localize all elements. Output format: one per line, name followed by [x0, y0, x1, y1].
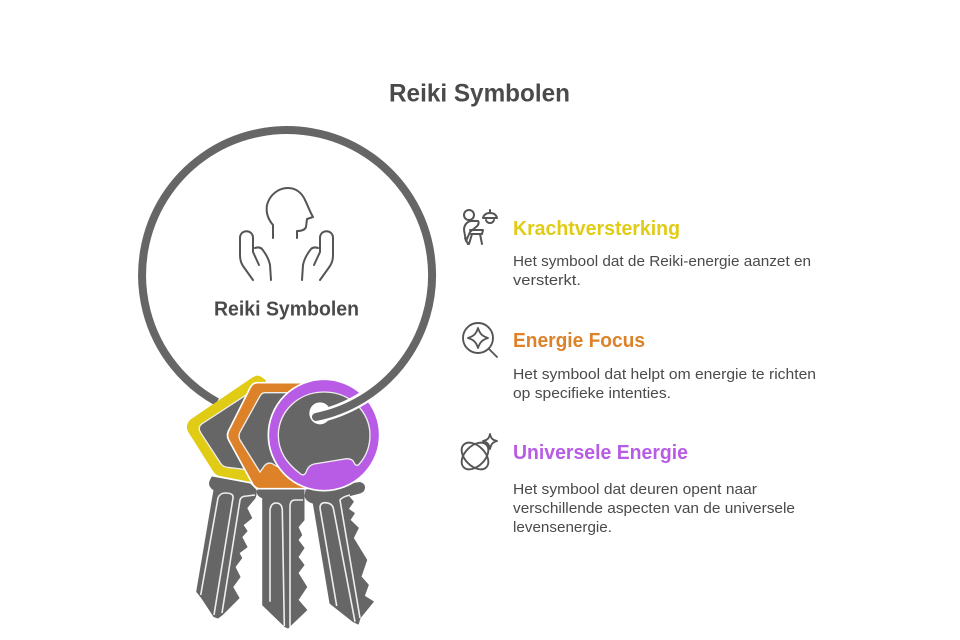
item: Energie Focus [463, 323, 816, 402]
key head: purple [268, 379, 380, 491]
icon: orbit with sparkle [457, 434, 497, 474]
key: centre blade [257, 490, 307, 628]
left hand [240, 231, 271, 280]
item: Krachtversterking [464, 210, 811, 289]
ring label: Reiki Symbolen [214, 298, 359, 320]
description: op specifieke intenties. [513, 386, 671, 402]
icon: person with raised hands [240, 188, 333, 280]
key hole [309, 402, 331, 424]
description: levensenergie. [513, 520, 612, 536]
heading: Energie Focus [513, 330, 645, 352]
right hand [302, 231, 333, 280]
item: Universele Energie [457, 434, 795, 536]
description: versterkt. [513, 273, 581, 289]
key: left blade [197, 477, 256, 618]
illustration: key ring with three keys [142, 130, 432, 628]
head [267, 188, 313, 238]
title: Reiki Symbolen [389, 80, 570, 108]
description [513, 482, 795, 536]
description: Het symbool dat deuren opent naar [513, 482, 757, 498]
heading: Krachtversterking [513, 218, 680, 240]
key: right blade [305, 482, 373, 624]
key head: yellow [187, 376, 266, 482]
ring: main arc [142, 130, 432, 402]
heading: Universele Energie [513, 442, 688, 464]
key head: orange [227, 383, 305, 489]
icon: magnifier with star [463, 323, 497, 357]
icon: person with lamp [464, 210, 497, 244]
key heads [187, 376, 380, 491]
description: verschillende aspecten van de universele [513, 501, 795, 517]
description: Het symbool dat de Reiki-energie aanzet en [513, 254, 811, 270]
ring: end passing through key hole [316, 366, 400, 417]
description [513, 367, 816, 402]
description [513, 254, 811, 289]
description: Het symbool dat helpt om energie te richten [513, 367, 816, 383]
